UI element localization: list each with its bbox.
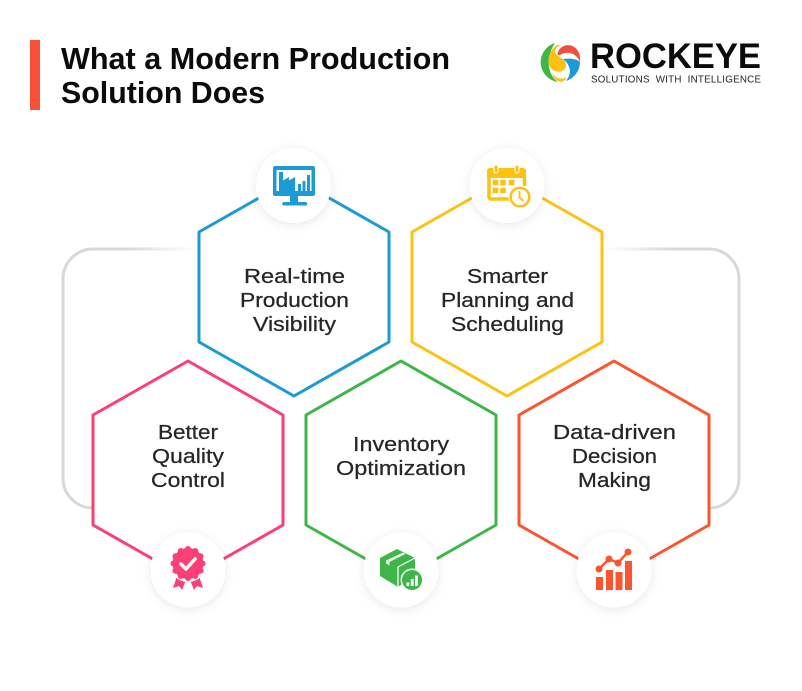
heading: real-time production visibility: Real-time [244,266,345,288]
icon: quality badge [150,532,226,608]
connector: right grey loop [603,249,739,508]
logo wordmark: ROCKEYE [590,37,761,76]
heading: real-time production visibility: Visibility [253,314,336,336]
logo mark: swirl [541,43,580,82]
accent bar [30,40,40,110]
title: What a Modern Production [61,41,450,76]
logo: Rockeye [541,37,761,86]
heading: better quality control [151,422,225,492]
icon: monitor with factory chart [256,148,331,223]
icon: inventory box [364,532,438,608]
heading: real-time production visibility: Production [240,290,349,312]
heading: better quality control: Quality [152,446,224,468]
heading: data-driven decision making: Making [578,470,651,492]
heading: smarter planning and scheduling [441,266,574,336]
heading: inventory optimization: Optimization [336,458,466,480]
icon: calendar with clock [470,148,544,223]
heading: smarter planning and scheduling: Smarter [467,266,548,288]
heading: smarter planning and scheduling: Planning and [441,290,574,312]
hexagon: smarter planning and scheduling [412,178,602,396]
heading: smarter planning and scheduling: Scheduling [451,314,564,336]
heading: inventory optimization [336,434,466,480]
heading: data-driven decision making [553,422,676,492]
title: Solution Does [61,75,265,110]
icon: rising bar chart [576,532,652,608]
title [61,41,450,110]
connector: left grey loop [63,249,197,508]
heading: real-time production visibility [240,266,349,336]
hexagon: better quality control [93,361,283,579]
logo tagline: SOLUTIONS WITH INTELLIGENCE [591,74,761,86]
heading: inventory optimization: Inventory [353,434,449,456]
heading: better quality control: Better [158,422,218,444]
heading: data-driven decision making: Decision [572,446,657,468]
hexagon: real-time production visibility [199,178,389,396]
heading: data-driven decision making: Data-driven [553,422,676,444]
hexagon: inventory optimization [306,361,496,579]
hexagon: data-driven decision making [519,361,709,579]
heading: better quality control: Control [151,470,225,492]
